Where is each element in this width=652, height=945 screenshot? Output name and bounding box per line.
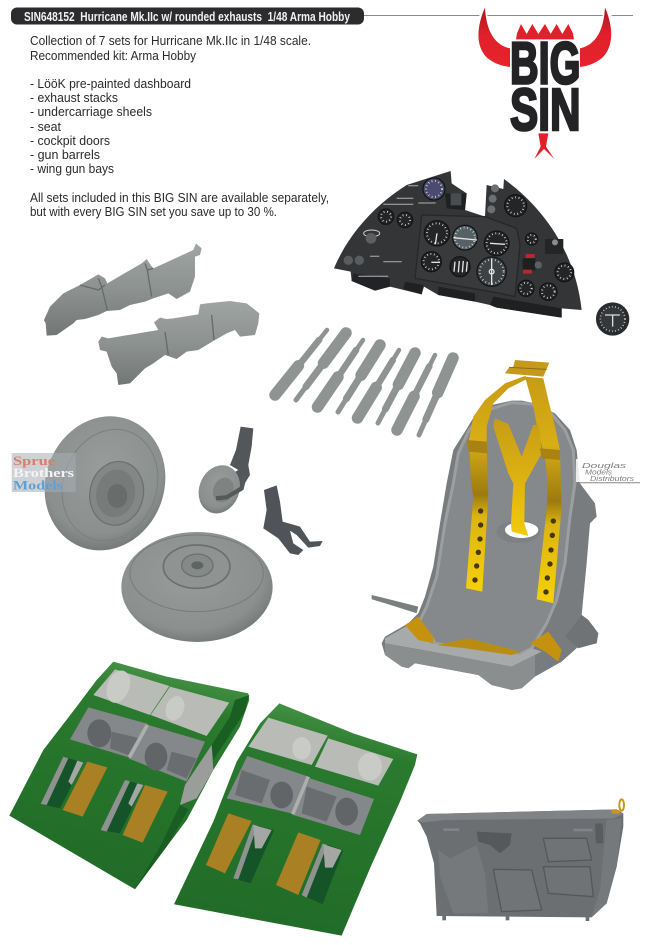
watermark: Sprue Brothers Models bbox=[12, 453, 76, 492]
exhaust stacks: first set bbox=[44, 243, 202, 336]
BIG SIN logo: SIN bbox=[510, 77, 580, 143]
dashboard bbox=[334, 171, 582, 318]
gauges bbox=[378, 178, 574, 300]
list of included sets: - seat bbox=[30, 120, 62, 134]
list of included sets bbox=[30, 77, 191, 176]
list of included sets: - LööK pre-painted dashboard bbox=[30, 77, 191, 91]
bottom main wheel bbox=[121, 532, 273, 642]
seat handle bbox=[372, 595, 418, 613]
watermark: Douglas Models Distributors: Douglas bbox=[582, 463, 627, 470]
list of included sets: - exhaust stacks bbox=[30, 91, 118, 105]
gun mount bracket bbox=[263, 485, 323, 555]
BIG SIN logo bbox=[478, 7, 612, 159]
seat harness straps bbox=[405, 360, 562, 662]
BIG SIN logo: BIG bbox=[510, 31, 580, 97]
tail wheel with strut bbox=[192, 427, 253, 520]
title bar bbox=[11, 8, 364, 24]
watermark: Sprue Brothers Models: Brothers bbox=[13, 466, 74, 480]
watermark: Sprue Brothers Models: Sprue bbox=[13, 454, 56, 468]
list of included sets: - gun barrels bbox=[30, 148, 100, 162]
intro text block: Collection of 7 sets for Hurricane Mk.IIc in 1/48 scale. bbox=[30, 34, 311, 48]
list of included sets: - undercarriage sheels bbox=[30, 105, 152, 119]
watermark: Douglas Models Distributors bbox=[576, 459, 640, 483]
savings note bbox=[30, 191, 329, 219]
watermark: Sprue Brothers Models: Models bbox=[13, 478, 63, 492]
large main wheel bbox=[26, 399, 184, 568]
list of included sets: - cockpit doors bbox=[30, 134, 110, 148]
exhaust stacks: second set bbox=[98, 301, 259, 385]
right wing gun bay door bbox=[174, 703, 417, 936]
cockpit door bbox=[417, 799, 624, 921]
small separate gauge bbox=[596, 302, 629, 336]
watermark: Douglas Models Distributors: Models bbox=[585, 470, 613, 476]
list of included sets: - wing gun bays bbox=[30, 162, 114, 176]
watermark: Douglas Models Distributors: Distributors bbox=[590, 476, 635, 483]
savings note: but with every BIG SIN set you save up to 30 %. bbox=[30, 205, 277, 219]
gun barrels bbox=[275, 330, 453, 435]
intro text block bbox=[30, 34, 311, 63]
savings note: All sets included in this BIG SIN are available separately, bbox=[30, 191, 329, 205]
intro text block: Recommended kit: Arma Hobby bbox=[30, 49, 197, 63]
left wing gun bay door bbox=[9, 662, 249, 889]
seat bbox=[372, 401, 598, 690]
title bar: SIN648152 Hurricane Mk.IIc w/ rounded exhausts 1/48 Arma Hobby bbox=[24, 10, 350, 24]
